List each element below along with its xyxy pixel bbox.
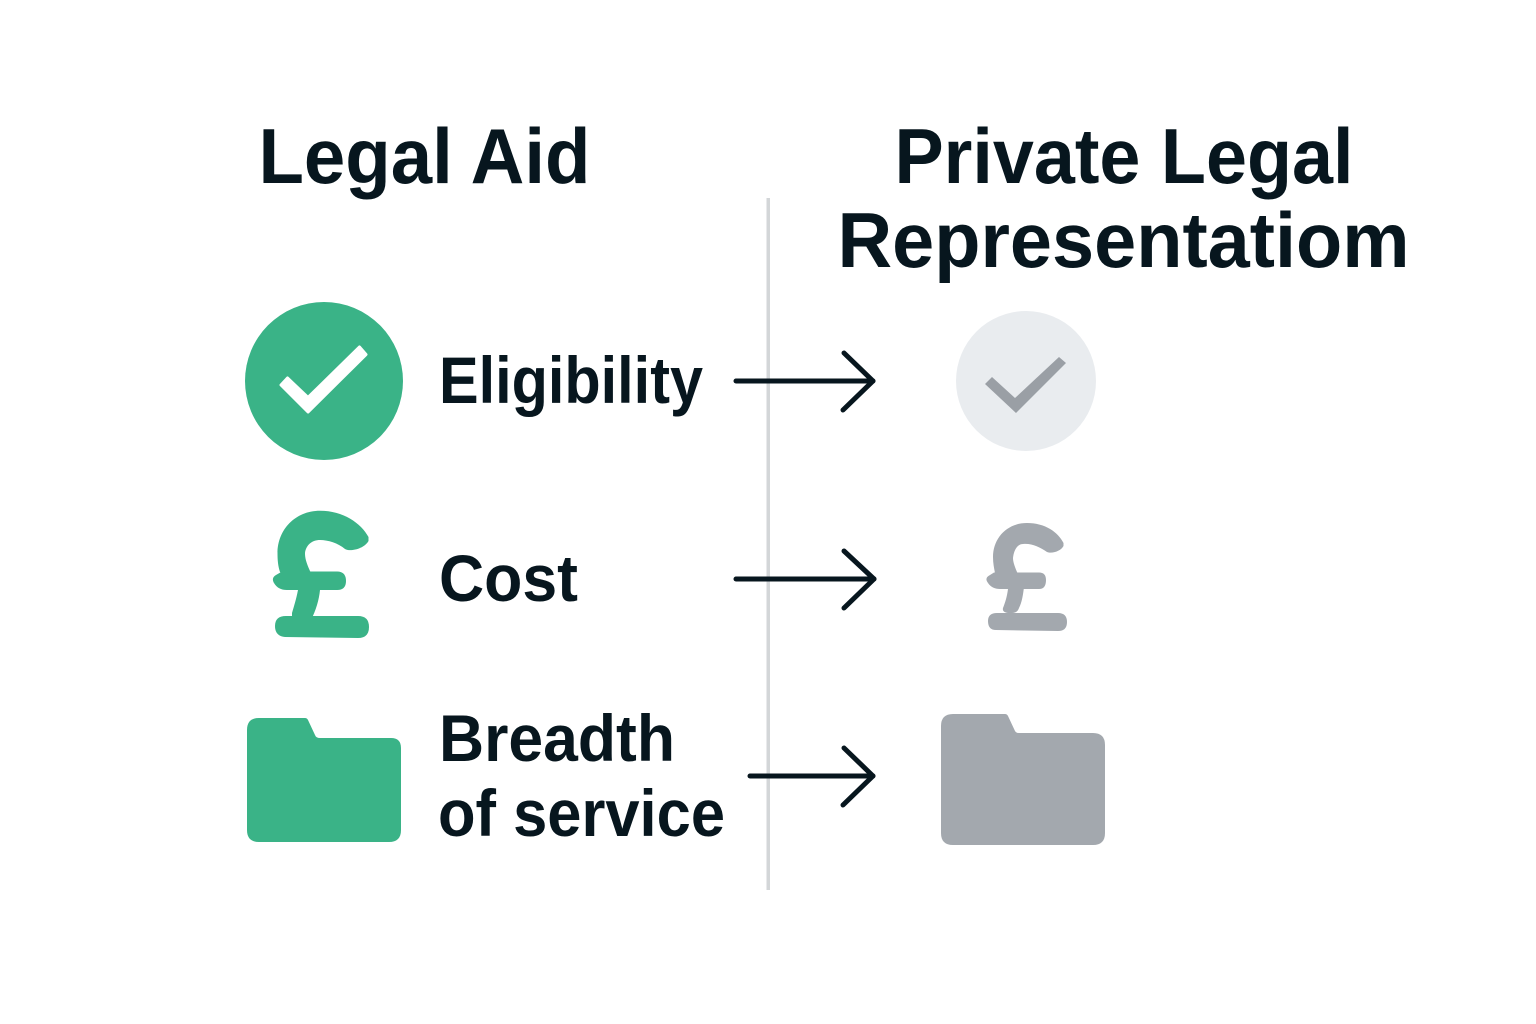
icon: grey pound sign — [986, 523, 1067, 631]
heading: Private Legal Representation — [838, 112, 1410, 284]
arrow: eligibility — [736, 353, 873, 410]
label: Breadth of service: Breadth — [439, 701, 675, 775]
icon: grey check circle — [956, 311, 1096, 451]
label: Breadth of service: of service — [438, 776, 725, 850]
icon: grey folder — [941, 714, 1105, 845]
label: Eligibility: Eligibility — [439, 343, 703, 417]
heading: Private Legal Representation: Private Legal — [894, 112, 1354, 200]
label: Breadth of service — [438, 701, 725, 850]
arrow: breadth of service — [750, 748, 873, 805]
icon: green check circle — [245, 302, 403, 460]
heading: Legal Aid: Legal Aid — [258, 112, 590, 200]
icon: green pound sign — [273, 511, 369, 638]
heading: Private Legal Representation: Representatiom — [838, 196, 1410, 284]
icon: green folder — [247, 718, 401, 842]
label: Cost: Cost — [439, 541, 578, 615]
arrow: cost — [736, 551, 874, 608]
